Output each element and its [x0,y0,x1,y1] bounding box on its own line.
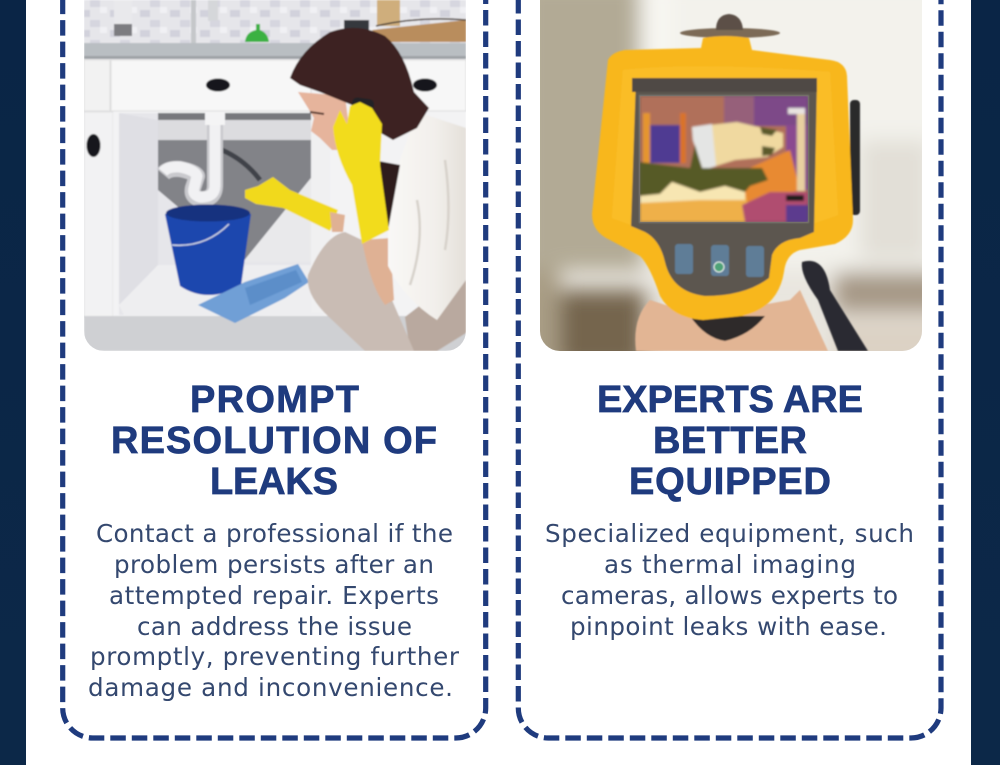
body text: contact a professional: can address the issue [137,612,412,641]
heading: prompt resolution of leaks: PROMPT [190,379,359,421]
body text: specialized equipment: pinpoint leaks with ease. [570,612,887,641]
body text: specialized equipment: as thermal imaging [604,550,856,579]
body text: contact a professional: promptly, preventing further [90,642,460,671]
photo: woman on the phone beside a leaking pipe and bucket [84,0,466,351]
heading: prompt resolution of leaks [111,379,437,503]
dashed card border: right [518,0,941,738]
dashed card border: left [63,0,486,738]
card: experts are better equipped [518,0,945,738]
body text: specialized equipment: Specialized equipment, such [545,519,914,548]
photo: hand holding a yellow thermal imaging camera [540,0,922,351]
heading: prompt resolution of leaks: RESOLUTION OF [111,420,437,462]
drain pipe [163,115,215,199]
body text: contact a professional: attempted repair. Experts [109,581,439,610]
heading: prompt resolution of leaks: LEAKS [210,461,338,503]
heading: experts are better equipped: EXPERTS ARE [597,379,863,421]
body text: contact a professional: problem persists after an [114,550,434,579]
woman [245,28,466,351]
bucket [165,204,251,295]
heading: experts are better equipped: EQUIPPED [629,461,831,503]
body text: contact a professional: Contact a professional if the [96,519,453,548]
thermal image on camera screen [640,96,808,222]
body text: contact a professional [88,519,460,702]
body text: specialized equipment: cameras, allows experts to [561,581,898,610]
heading: experts are better equipped [597,379,863,503]
heading: experts are better equipped: BETTER [653,420,807,462]
body text: contact a professional: damage and inconvenience. [88,673,453,702]
body text: specialized equipment [545,519,914,641]
card: prompt resolution of leaks [63,0,486,738]
